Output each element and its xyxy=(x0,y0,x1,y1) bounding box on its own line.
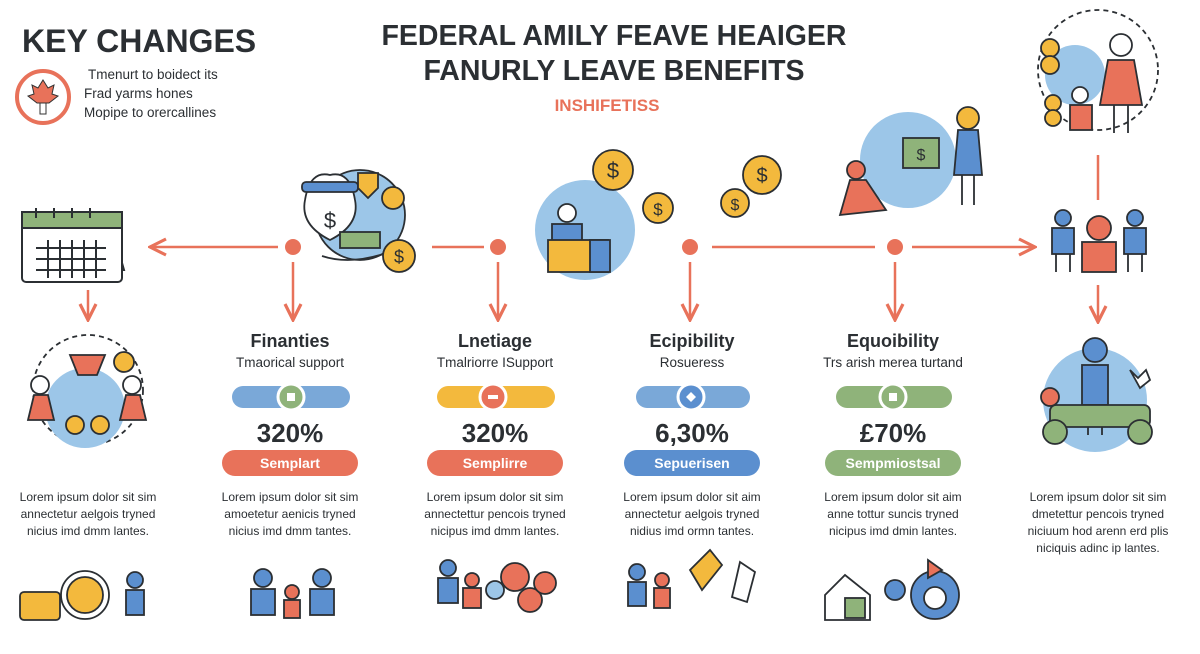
column: lnetiage: Tmalriorre ISupport xyxy=(437,355,553,370)
icon: people at desk with coins: $ xyxy=(756,165,768,187)
column: equoibility: £70% xyxy=(860,418,926,448)
column: finanties: Semplart xyxy=(260,455,320,471)
key changes list: Frad yarms hones xyxy=(84,86,193,101)
bottom icons row xyxy=(20,550,959,620)
main title xyxy=(381,20,847,87)
icon: right circle parent with money xyxy=(1041,338,1152,452)
column: equoibility: Lorem ipsum dolor sit aim xyxy=(824,490,962,504)
icon: wallet and coin xyxy=(20,571,144,620)
column: ecibility: annectetur aelgois tryned xyxy=(625,507,759,521)
column: lnetiage: annectettur pencois tryned xyxy=(424,507,566,521)
column: finanties: 320% xyxy=(257,418,323,448)
column: equoibility: anne tottur suncis tryned xyxy=(827,507,959,521)
text: right column: Lorem ipsum dolor sit sim xyxy=(1030,490,1166,504)
icon: maple leaf badge xyxy=(17,71,69,123)
icon: family and coins (top right) xyxy=(1038,10,1158,133)
text: right column: dmetettur pencois tryned xyxy=(1032,507,1164,521)
text: right column xyxy=(1028,490,1168,555)
column: lnetiage: Lnetiage xyxy=(458,331,532,351)
icon: money bag with hands xyxy=(302,170,415,272)
key changes list: Tmenurt to boidect its xyxy=(88,67,218,82)
column: ecibility xyxy=(623,331,761,538)
icon: people at desk with coins: $ xyxy=(731,197,740,214)
subtitle: INSHIFETISS xyxy=(555,96,659,115)
column: lnetiage: Lorem ipsum dolor sit sim xyxy=(427,490,563,504)
main title: FANURLY LEAVE BENEFITS xyxy=(423,55,805,87)
icon: family xyxy=(251,569,334,618)
column: finanties xyxy=(222,331,358,538)
icon: money bag with hands: $ xyxy=(394,247,404,267)
timeline xyxy=(88,155,1098,320)
text: left column: Lorem ipsum dolor sit sim xyxy=(20,490,156,504)
icon: parent and child with money: $ xyxy=(917,147,926,164)
column: equoibility: Trs arish merea turtand xyxy=(823,355,963,370)
text: right column: niciuum hod arenn erd plis xyxy=(1028,524,1168,538)
key changes list xyxy=(84,67,218,120)
column: ecibility: 6,30% xyxy=(655,418,729,448)
icon: people at desk with coins: $ xyxy=(607,158,619,183)
column: lnetiage: Semplirre xyxy=(463,455,528,471)
text: left column: nicius imd dmm lantes. xyxy=(27,524,149,538)
icon: left circle team xyxy=(28,335,146,448)
column: lnetiage: nicipus imd dmm lantes. xyxy=(431,524,559,538)
text: left column xyxy=(20,490,156,538)
column: equoibility xyxy=(823,331,963,538)
column: finanties: Finanties xyxy=(250,331,330,351)
column: finanties: Lorem ipsum dolor sit sim xyxy=(222,490,358,504)
icon: people at desk with coins xyxy=(535,150,781,280)
icon: family with coins xyxy=(438,560,556,612)
column: lnetiage xyxy=(424,331,566,538)
column: lnetiage: 320% xyxy=(462,418,528,448)
column: ecibility: Lorem ipsum dolor sit aim xyxy=(623,490,761,504)
icon: calendar xyxy=(22,208,124,282)
icon: house and money bag xyxy=(825,560,959,620)
text: right column: niciquis adinc ip lantes. xyxy=(1036,541,1160,555)
column: equoibility: Sempmiostsal xyxy=(846,455,940,471)
icon: money bag with hands: $ xyxy=(324,208,336,233)
timeline dots xyxy=(285,239,903,255)
main title: FEDERAL AMILY FEAVE HEAIGER xyxy=(381,20,847,52)
column: equoibility: Equoibility xyxy=(847,331,939,351)
column: finanties: Tmaorical support xyxy=(236,355,344,370)
icon: parent and child with money xyxy=(840,107,982,215)
icon: family group xyxy=(1052,210,1146,272)
text: left column: annectetur aelgois tryned xyxy=(21,507,155,521)
column: ecibility: nidius imd ormn tantes. xyxy=(630,524,754,538)
icon: family with hands xyxy=(628,550,755,608)
column: finanties: amoetetur aenicis tryned xyxy=(224,507,356,521)
icon: people at desk with coins: $ xyxy=(653,200,663,219)
column: ecibility: Sepuerisen xyxy=(654,455,730,471)
column: equoibility: nicipus imd dmin lantes. xyxy=(829,524,957,538)
key changes list: Mopipe to orercallines xyxy=(84,105,216,120)
column: finanties: nicius imd dmm tantes. xyxy=(229,524,351,538)
column: ecibility: Ecipibility xyxy=(649,331,735,351)
column: ecibility: Rosueress xyxy=(660,355,725,370)
title: key changes: KEY CHANGES xyxy=(22,23,256,59)
